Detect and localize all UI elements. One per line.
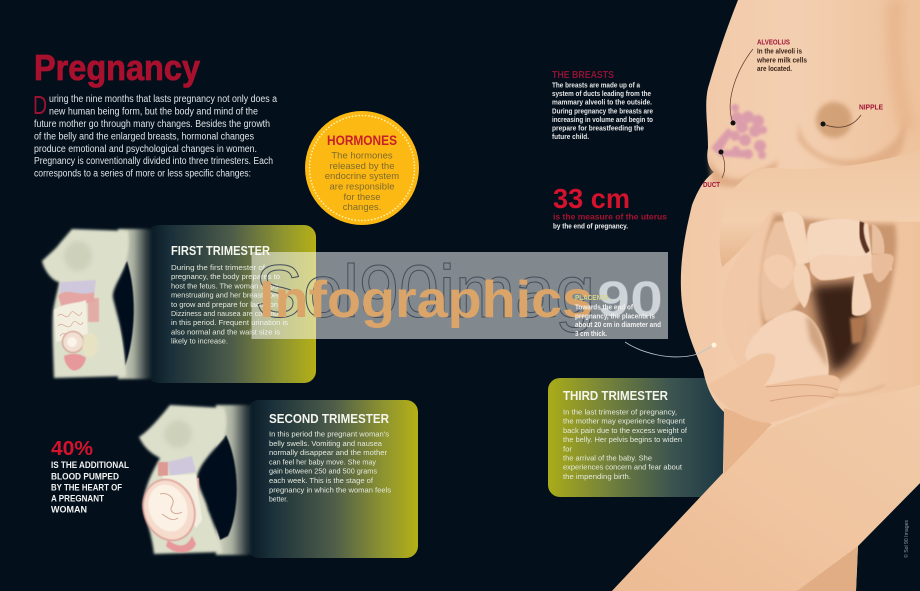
intro text block: uring the nine months that lasts pregnancy not only does a: [49, 94, 277, 105]
panel: first trimester: Dizziness and nausea are common: [171, 309, 282, 318]
panel: second trimester: pregnancy in which the woman feels: [269, 485, 391, 494]
panel: third trimester: back pain due to the excess weight of: [563, 426, 688, 435]
panel: second trimester: each week. This is the stage of: [269, 476, 374, 485]
panel: third trimester: experiences concern and fear about: [563, 463, 683, 472]
panel: first trimester: also normal and the waist size is: [171, 327, 280, 336]
intro text block: Pregnancy is conventionally divided into three trimesters. Each: [34, 156, 273, 167]
panel: second trimester: can feel her baby move. She may: [269, 457, 376, 466]
text block: placenta: 3 cm thick.: [575, 329, 607, 338]
stat: 40 percent: WOMAN: [51, 504, 87, 514]
thigh: [612, 385, 920, 591]
text block: placenta: [575, 293, 661, 338]
panel: third trimester: the impending birth.: [563, 472, 631, 481]
fetus: [744, 211, 894, 386]
callout: hormones: are responsible: [330, 182, 394, 192]
annotation: alveolus: where milk cells: [756, 57, 807, 64]
body edge highlight: [886, 0, 916, 130]
intro text block: of the belly and the enlarged breasts, hormonal changes: [34, 132, 254, 142]
panel: third trimester: the belly. Her pelvis begins to widen: [563, 435, 682, 444]
panel: first trimester: likely to increase.: [171, 337, 228, 346]
title: Pregnancy: [34, 47, 200, 88]
fetus ear: [744, 318, 762, 338]
stat: 40 percent: [51, 438, 130, 514]
stat: 40 percent: BLOOD PUMPED: [51, 472, 119, 482]
stat: 33 cm: by the end of pregnancy.: [553, 222, 628, 230]
panel: first trimester: [147, 225, 316, 383]
stat: 40 percent: IS THE ADDITIONAL: [51, 460, 130, 470]
panel: second trimester: gain between 250 and 500 grams: [269, 467, 377, 476]
belly crease: [832, 385, 885, 395]
intro text block: new human being form, but the body and mind of the: [49, 106, 258, 118]
panel: third trimester: [548, 378, 738, 497]
fetus hand left: [764, 254, 794, 289]
intro text block: [33, 90, 277, 180]
annotation: duct: DUCT: [703, 180, 720, 189]
fetus lower foot: [852, 272, 871, 316]
finger crease: [766, 385, 838, 401]
panel: second trimester: belly swells. Vomiting and nausea: [269, 439, 383, 448]
intro text block: future mother go through many changes. Besides the growth: [34, 119, 270, 130]
callout: hormones: changes.: [343, 202, 381, 213]
annotation: alveolus: are located.: [757, 66, 792, 73]
fetus belly right: [872, 224, 884, 254]
panel: first trimester: in this period. Frequent urination is: [171, 318, 288, 327]
panel: first trimester: host the fetus. The woman stops: [171, 281, 278, 290]
umbilical cord: [861, 222, 868, 252]
annotation: alveolus: ALVEOLUS: [757, 38, 790, 46]
watermark: 90: [597, 271, 663, 327]
callout: hormones: endocrine system: [325, 171, 399, 182]
intro text block: corresponds to a series of more or less specific changes:: [34, 168, 251, 180]
callout: hormones: for these: [344, 192, 380, 203]
callout: hormones: The hormones: [331, 150, 393, 162]
panel: third trimester: for: [563, 444, 572, 453]
fetus hand right: [793, 264, 811, 308]
text block: placenta: PLACENTA: [575, 293, 609, 302]
callout: hormones: released by the: [330, 161, 394, 172]
right breast shading: [798, 118, 905, 167]
panel: third trimester: In the last trimester of pregnancy,: [563, 408, 677, 416]
fetus thigh: [810, 254, 892, 280]
fetus cavity: [761, 214, 896, 384]
stat: 40 percent: 40%: [51, 438, 93, 460]
annotation: nipple: [820, 102, 883, 127]
fetus upper arm: [782, 211, 810, 266]
watermark: Sol90imag: [255, 250, 595, 333]
panel: second trimester: normally disappear and the mother: [269, 448, 387, 457]
panel: first trimester: menstruating and her breasts begin: [171, 291, 287, 300]
annotation: alveolus: In the alveoli is: [757, 48, 802, 56]
text block: placenta: pregnancy, the placenta is: [575, 311, 655, 320]
text block: the breasts: future child.: [552, 132, 589, 141]
annotation: duct: [703, 150, 725, 189]
illustration: second trimester torso: [135, 405, 252, 555]
text block: the breasts: The breasts are made up of a: [552, 80, 641, 90]
intro text block: produce emotional and psychological changes in women.: [34, 144, 257, 155]
dark cavity: [812, 282, 864, 372]
stat: 33 cm: is the measure of the uterus: [553, 212, 667, 222]
text block: placenta: Towards the end of: [575, 302, 633, 312]
left breast shading: [708, 152, 778, 187]
callout: hormones: HORMONES: [327, 132, 397, 148]
belly side: [722, 210, 795, 366]
copyright: © Sol 90 Images: [903, 519, 910, 558]
illustration: first trimester torso: [42, 229, 152, 379]
text block: the breasts: system of ducts leading from the: [552, 89, 651, 98]
icon: areola: [816, 102, 852, 138]
panel: third trimester: the arrival of the baby. She: [563, 454, 652, 462]
stat: 40 percent: BY THE HEART OF: [51, 482, 123, 492]
hand under belly: [708, 353, 840, 423]
text block: the breasts: increasing in volume and begin to: [552, 115, 654, 124]
panel: second trimester: SECOND TRIMESTER: [269, 412, 389, 426]
panel: third trimester: THIRD TRIMESTER: [563, 389, 668, 403]
text block: the breasts: During pregnancy the breasts are: [552, 106, 653, 115]
panel: first trimester: pregnancy, the body prepares to: [171, 272, 280, 281]
forearm: [720, 150, 920, 267]
panel: third trimester: the mother may experience frequent: [563, 417, 686, 426]
callout: hormones: [305, 111, 419, 225]
text block: the breasts: THE BREASTS: [552, 70, 614, 81]
panel: first trimester: to grow and prepare for lactation.: [171, 300, 280, 309]
illustration: pregnant woman body: [612, 0, 920, 591]
annotation: alveolus: [730, 38, 807, 126]
panel: second trimester: [247, 400, 418, 558]
torso shadow behind hand: [724, 408, 772, 474]
body silhouette: [612, 0, 920, 591]
text block: the breasts: mammary alveoli to the outside.: [552, 98, 652, 107]
text block: placenta: about 20 cm in diameter and: [575, 320, 661, 329]
fetus head: [745, 310, 829, 386]
alveoli illustration: [711, 104, 767, 159]
fetus hair shade: [806, 316, 828, 368]
fetus foot: [871, 253, 894, 282]
panel: second trimester: In this period the pregnant woman's: [269, 430, 389, 438]
text block: the breasts: [552, 70, 654, 141]
text block: the breasts: prepare for breastfeeding the: [552, 124, 644, 132]
fetus flank: [760, 220, 812, 322]
stat: 33 cm: 33 cm: [553, 183, 630, 214]
stat: 33 cm: [553, 183, 667, 230]
watermark: Infographics: [259, 271, 593, 329]
rear leg: [797, 546, 858, 591]
drop cap: D: [33, 90, 47, 120]
fetus torso: [806, 219, 872, 268]
stat: 40 percent: A PREGNANT: [51, 494, 105, 504]
panel: first trimester: FIRST TRIMESTER: [171, 244, 270, 258]
lower leg shade: [850, 316, 866, 344]
panel: first trimester: During the first trimester of: [171, 263, 266, 272]
placenta leader line: [625, 342, 716, 357]
annotation: nipple: NIPPLE: [859, 102, 883, 112]
panel: second trimester: better.: [269, 495, 288, 504]
